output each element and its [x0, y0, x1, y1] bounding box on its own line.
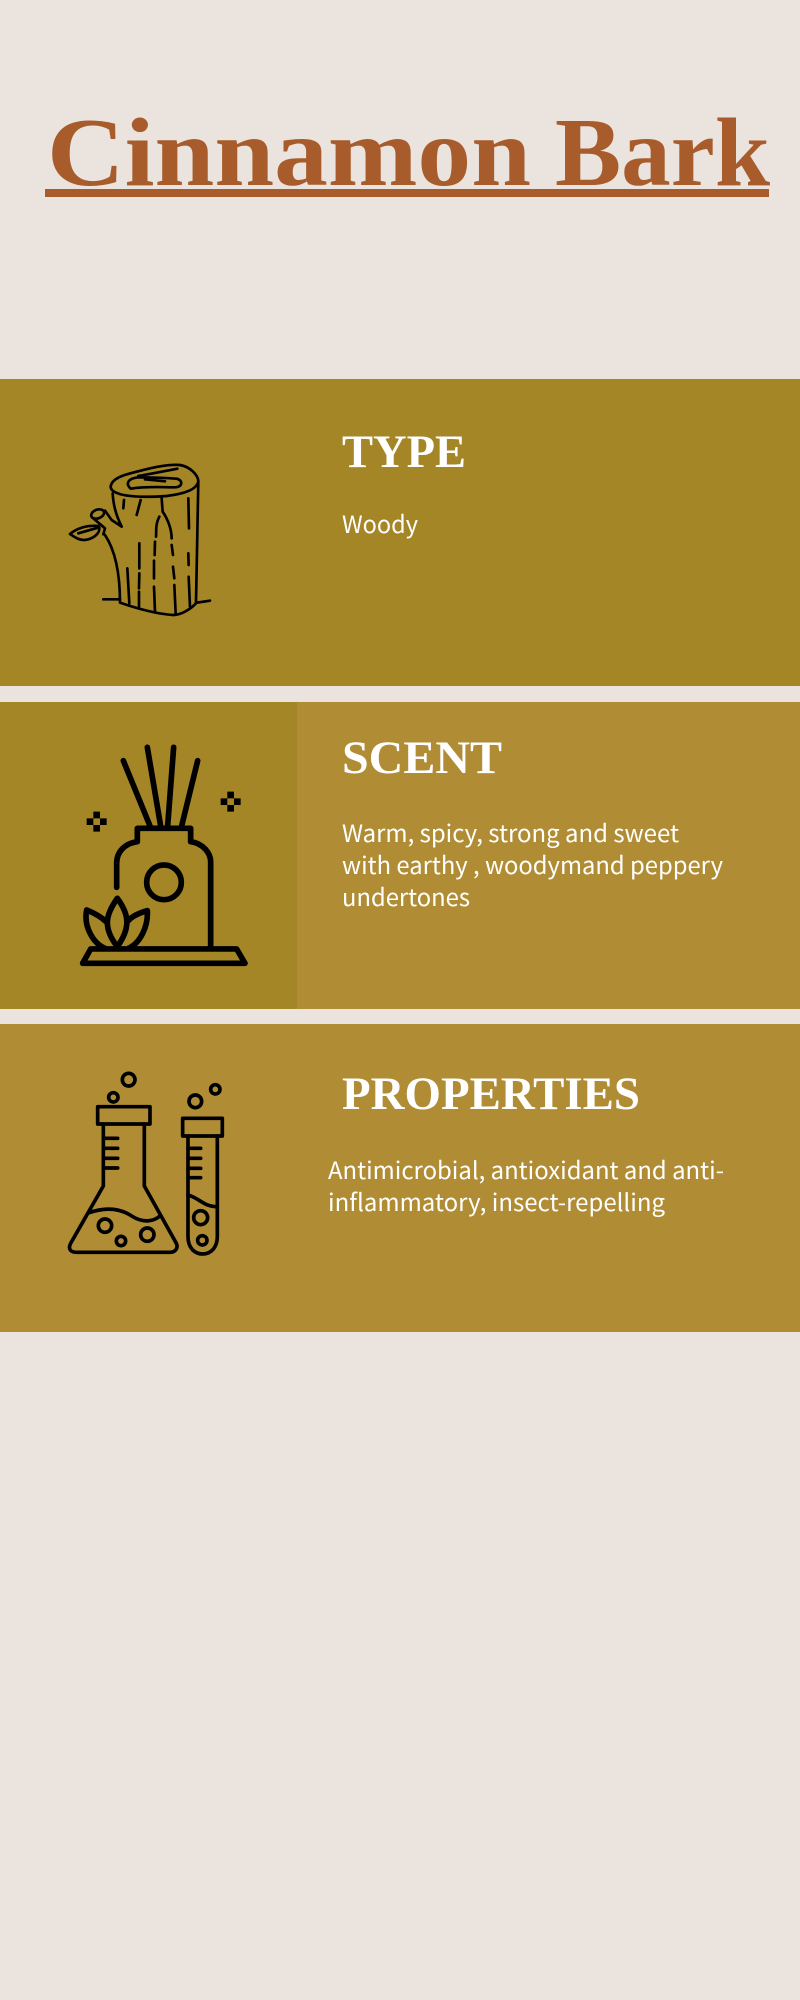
icon background: scent — [0, 702, 297, 1009]
heading: SCENT: SCENT — [342, 732, 502, 784]
text: properties description: inflammatory, insect-repelling — [328, 1183, 665, 1218]
text: properties description — [328, 1151, 724, 1218]
text: scent description: with earthy , woodymand peppery — [342, 846, 723, 881]
panel: scent — [0, 702, 800, 1009]
icon: tree stump — [70, 465, 210, 615]
title: Cinnamon Bark: Cinnamon — [47, 99, 531, 206]
text: scent description: undertones — [342, 878, 470, 913]
heading: TYPE: TYPE — [342, 426, 466, 478]
title: Cinnamon Bark — [45, 99, 770, 206]
panel: type — [0, 379, 800, 686]
text: scent description — [342, 814, 723, 913]
icon: reed diffuser — [83, 747, 245, 963]
text: scent description: Warm, spicy, strong and sweet — [342, 814, 679, 849]
text: properties description: Antimicrobial, antioxidant and anti- — [328, 1151, 724, 1186]
panel: properties — [0, 1024, 800, 1332]
title: Cinnamon Bark: Bark — [555, 99, 770, 206]
text: Woody: Woody — [342, 505, 418, 540]
icon: lab flask and test tube — [69, 1073, 222, 1254]
heading: PROPERTIES: PROPERTIES — [342, 1068, 640, 1120]
